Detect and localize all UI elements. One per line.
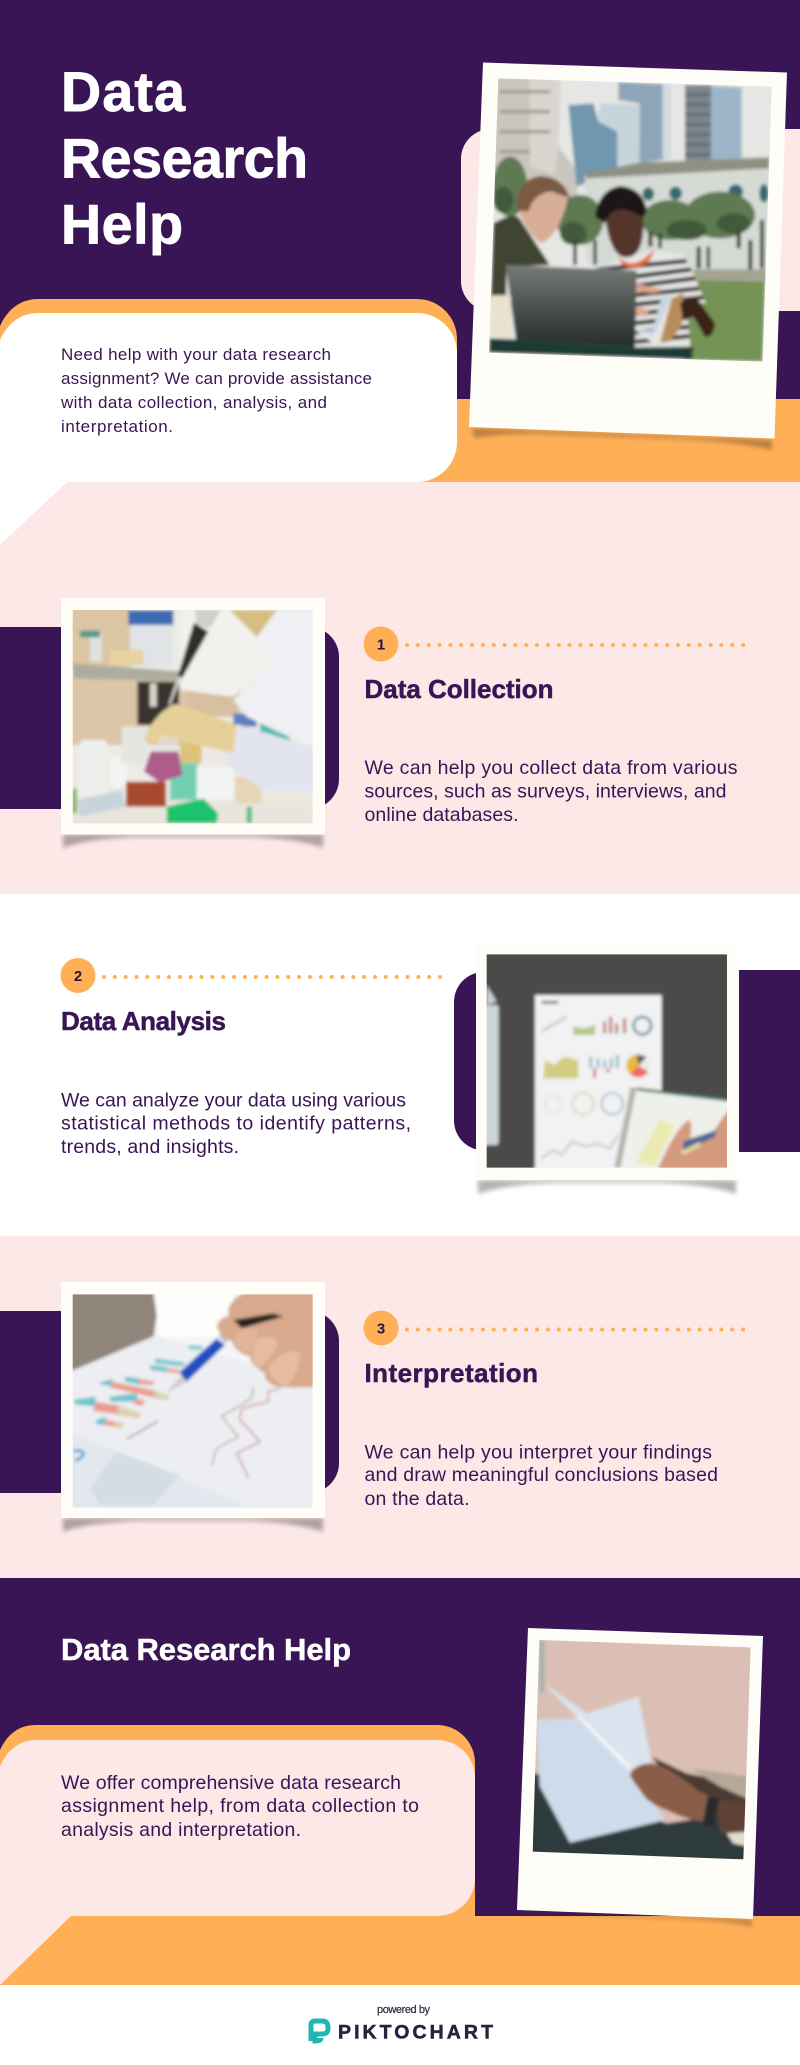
- photo card: charts: [476, 944, 738, 1194]
- summary text: assignment help, from data collection to: [61, 1795, 419, 1817]
- heading: Interpretation: [364, 1358, 538, 1388]
- intro text: interpretation.: [61, 417, 173, 436]
- wordmark: PIKTOCHART: [338, 2022, 493, 2044]
- description: We can help you collect data from various: [364, 757, 738, 779]
- icon: Piktochart logo: [311, 2021, 328, 2041]
- purple backing block: [0, 1311, 339, 1493]
- number badge 3: 3: [377, 1320, 385, 1338]
- number badge 1: [364, 626, 398, 662]
- intro text: with data collection, analysis, and: [60, 393, 327, 412]
- heading: Data Analysis: [61, 1006, 226, 1036]
- number badge 1: 1: [377, 636, 385, 654]
- title: Research: [61, 128, 308, 190]
- powered by label: powered by: [377, 2004, 430, 2016]
- intro text: [60, 345, 372, 436]
- photo: two men at laptop: [489, 78, 772, 362]
- panel: hero: [0, 0, 800, 482]
- description: [364, 1442, 718, 1510]
- intro text: Need help with your data research: [61, 345, 331, 364]
- description: We can help you interpret your findings: [364, 1442, 712, 1464]
- panel: interpretation: [0, 1236, 800, 1578]
- purple backing block: [0, 627, 339, 809]
- description: on the data.: [364, 1488, 470, 1510]
- summary text: [61, 1772, 419, 1841]
- photo: lab pipette: [70, 607, 317, 827]
- description: and draw meaningful conclusions based: [364, 1464, 718, 1486]
- heading: Data Collection: [364, 674, 554, 704]
- summary text: analysis and interpretation.: [61, 1819, 301, 1841]
- footer: powered by Piktochart: [0, 1985, 800, 2065]
- intro text: assignment? We can provide assistance: [61, 369, 372, 388]
- photo card: lab: [61, 598, 325, 848]
- description: [364, 757, 738, 826]
- panel: data analysis: [60, 954, 800, 1196]
- pink shape behind photo: [461, 129, 800, 311]
- description: statistical methods to identify patterns,: [61, 1112, 411, 1134]
- photo card: team with laptop: [469, 62, 787, 450]
- title: Help: [61, 194, 183, 256]
- dotted line: [104, 975, 441, 979]
- photo card: papers: [517, 1628, 763, 1927]
- description: sources, such as surveys, interviews, and: [364, 780, 726, 802]
- panel: step 1 background: [0, 482, 800, 894]
- title: [61, 61, 308, 256]
- number badge 2: 2: [74, 968, 82, 985]
- number badge 2: [60, 958, 96, 993]
- summary card: [0, 1725, 475, 1916]
- summary heading: Data Research Help: [61, 1632, 351, 1667]
- description: [61, 1090, 411, 1158]
- number badge 3: [364, 1310, 398, 1346]
- intro card: [0, 299, 457, 482]
- photo: printed charts and hand: [483, 952, 730, 1172]
- title: Data: [61, 61, 186, 123]
- summary text: We offer comprehensive data research: [61, 1772, 401, 1794]
- description: trends, and insights.: [61, 1136, 239, 1158]
- purple backing block: [454, 970, 800, 1152]
- orange ground band: [0, 1916, 800, 1985]
- dotted line: [407, 1328, 745, 1332]
- description: online databases.: [364, 804, 518, 826]
- photo card: pen on chart: [61, 1282, 325, 1532]
- panel: summary: [0, 1578, 800, 1985]
- photo: hands holding papers: [532, 1640, 750, 1860]
- description: We can analyze your data using various: [61, 1090, 406, 1112]
- panel: data collection: [0, 598, 745, 848]
- dotted line: [407, 643, 745, 647]
- photo: hand with blue pen: [70, 1292, 317, 1512]
